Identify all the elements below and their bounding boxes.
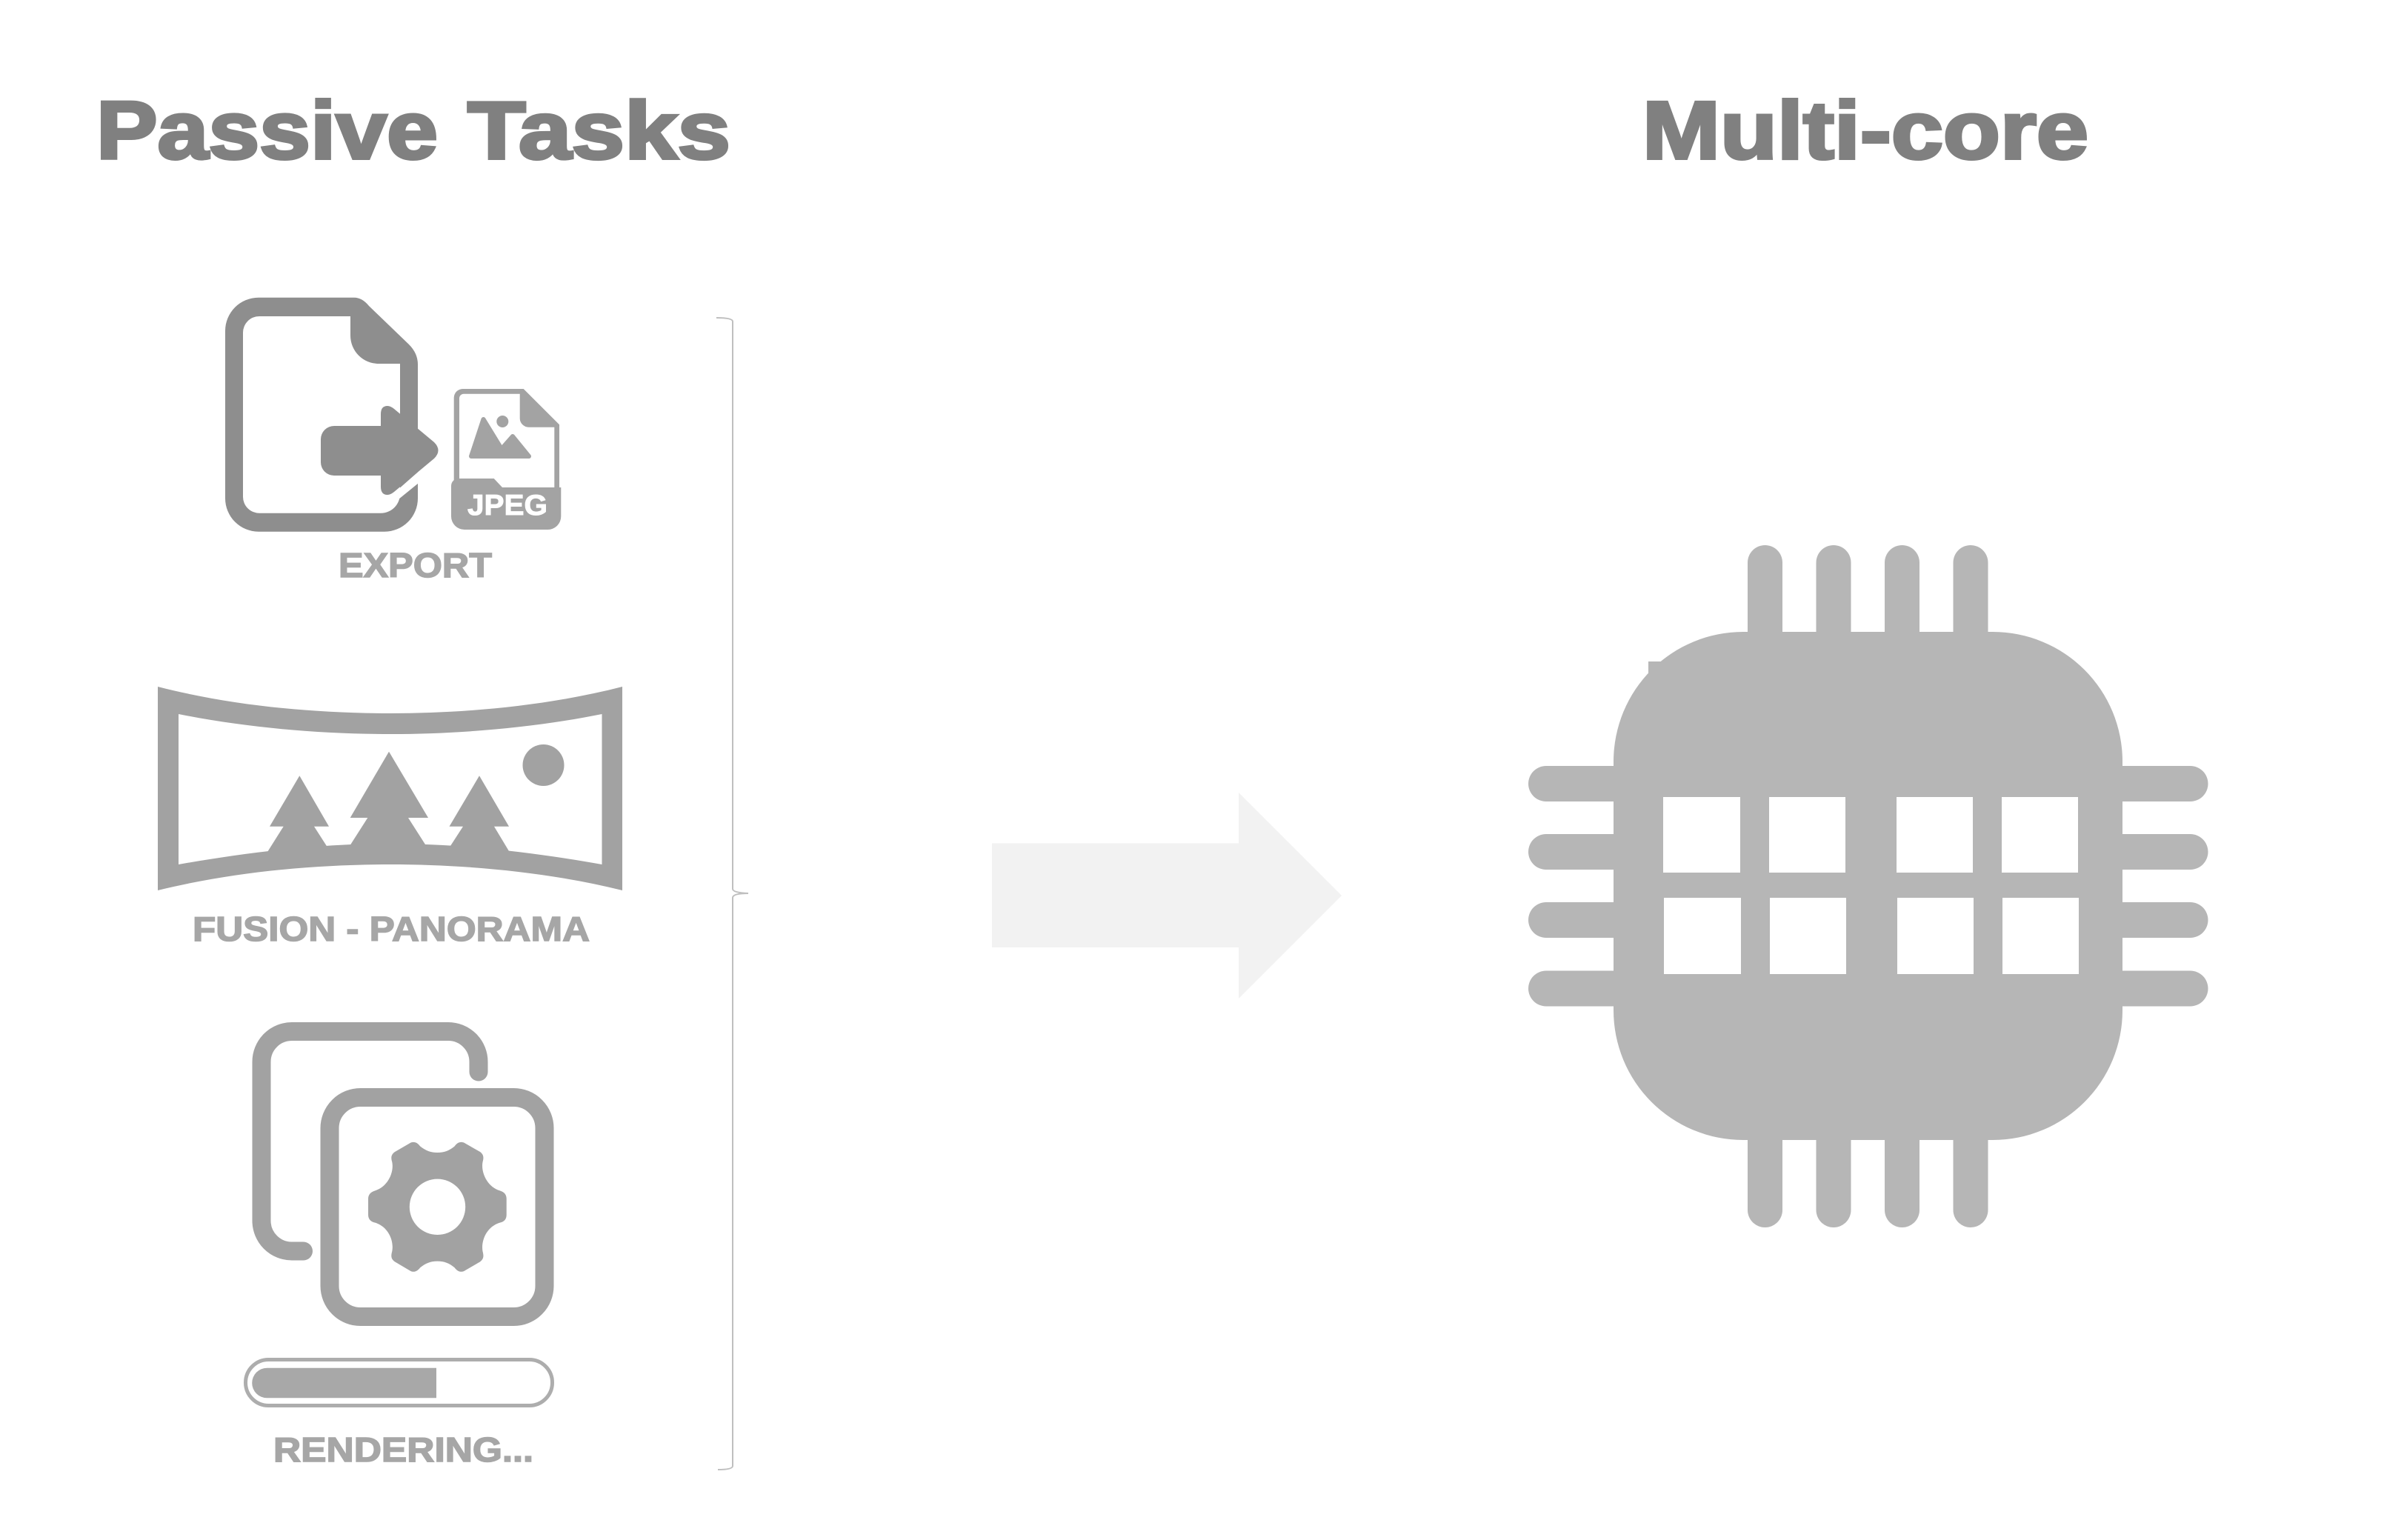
arrow xyxy=(992,793,1342,999)
bracket xyxy=(716,318,748,1470)
label: FUSION - PANORAMA: FUSION - PANORAMA xyxy=(193,910,590,948)
heading: Passive Tasks: Passive xyxy=(96,85,438,176)
heading: Passive Tasks: Tasks xyxy=(467,85,730,176)
icon: JPEG file: JPEG xyxy=(467,490,547,521)
icon: rendering windows with gear xyxy=(262,1031,545,1317)
label: RENDERING...: RENDERING xyxy=(273,1430,502,1469)
label: RENDERING...: ... xyxy=(502,1430,533,1469)
core windows xyxy=(1663,797,2079,974)
heading: Passive Tasks xyxy=(96,85,730,176)
heading: Multi-core: Multi-core xyxy=(1642,85,2088,176)
icon: export file with arrow xyxy=(225,298,439,532)
icon: multi-core chip xyxy=(1528,545,2208,1227)
label: EXPORT: EXPORT xyxy=(339,546,492,584)
icon: JPEG file xyxy=(451,389,561,530)
progress bar xyxy=(246,1360,553,1406)
icon: panorama frame with trees and sun xyxy=(158,687,622,890)
